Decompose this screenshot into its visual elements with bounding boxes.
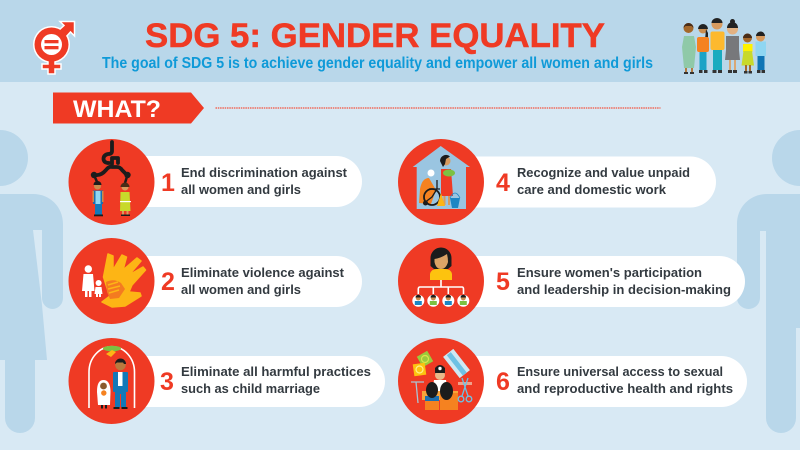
text: item 1: all women and girls <box>181 182 301 197</box>
text: item 3: Eliminate all harmful practices <box>181 364 371 379</box>
item 2: eliminate violence <box>68 238 362 324</box>
item 5: leadership <box>398 238 745 324</box>
text: item 4: Recognize and value unpaid <box>517 165 690 180</box>
icon: health worker, patients and supplies <box>398 338 484 424</box>
section banner: WHAT? <box>53 92 204 124</box>
item 1: end discrimination <box>68 139 362 225</box>
number 3: 3 <box>160 368 174 396</box>
header band <box>0 0 800 82</box>
icon: claw over boy and girl <box>68 139 154 225</box>
icon: child bride and groom under arch <box>68 338 154 424</box>
section banner: WHAT?: WHAT? <box>73 96 161 123</box>
icon: hand over woman and child <box>68 238 154 324</box>
text: item 5 <box>517 265 731 297</box>
text: item 1 <box>181 165 348 197</box>
text: item 4 <box>517 165 690 197</box>
number 5: 5 <box>496 268 510 296</box>
text: item 2 <box>181 265 345 297</box>
icon: house with carer <box>398 139 484 225</box>
text: item 5: and leadership in decision-making <box>517 282 731 297</box>
number 4: 4 <box>496 169 510 197</box>
item 3: harmful practices <box>68 338 385 424</box>
icon: gender equality symbol <box>33 22 74 74</box>
text: item 6 <box>517 364 733 396</box>
text: item 6: and reproductive health and rights <box>517 381 733 396</box>
text: item 3: such as child marriage <box>181 381 320 396</box>
text: item 1: End discrimination against <box>181 165 348 180</box>
number 6: 6 <box>496 368 510 396</box>
item 4: unpaid care <box>398 139 716 225</box>
text: item 3 <box>181 364 371 396</box>
title: SDG 5: GENDER EQUALITY <box>145 17 605 55</box>
icon: woman leader with team <box>398 238 484 324</box>
silhouette: woman <box>0 130 63 433</box>
text: item 2: Eliminate violence against <box>181 265 345 280</box>
text: item 4: care and domestic work <box>517 182 667 197</box>
text: item 2: all women and girls <box>181 282 301 297</box>
icon: group of people <box>682 18 766 74</box>
item 6: reproductive health <box>398 338 747 424</box>
number 1: 1 <box>161 169 175 197</box>
text: item 6: Ensure universal access to sexual <box>517 364 723 379</box>
subtitle: The goal of SDG 5 is to achieve gender equality and empower all women and girls <box>102 55 653 72</box>
number 2: 2 <box>161 268 175 296</box>
silhouette: man <box>737 130 800 433</box>
text: item 5: Ensure women's participation <box>517 265 702 280</box>
